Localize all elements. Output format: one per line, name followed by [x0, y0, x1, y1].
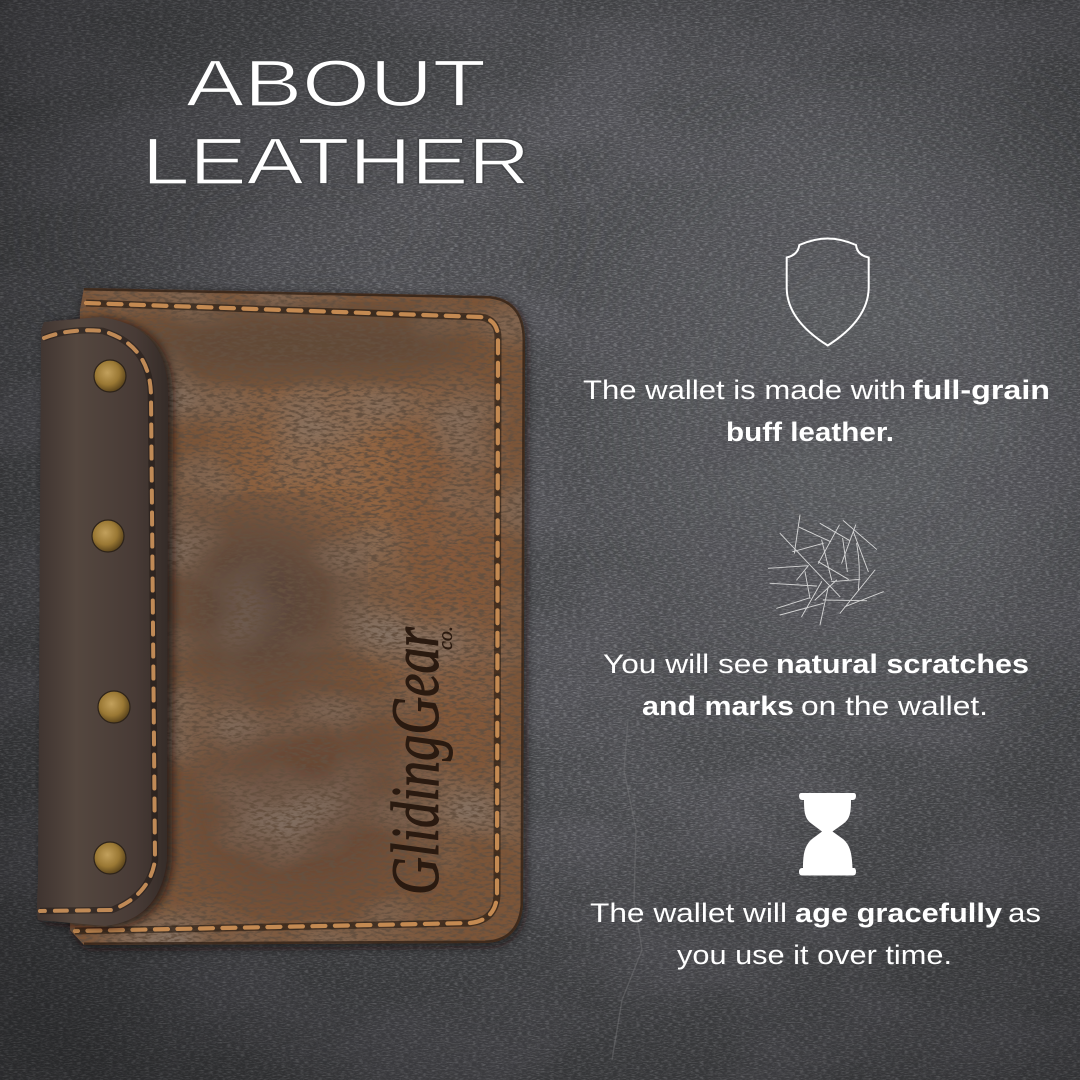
feature: natural scratches — [603, 515, 1029, 721]
text: scratches — [603, 649, 1029, 721]
text: scratches: natural scratches — [776, 649, 1029, 679]
icon: hourglass — [799, 793, 856, 876]
brass rivets — [92, 360, 130, 874]
text: scratches: You will see — [603, 649, 769, 679]
text: scratches: on the wallet. — [801, 691, 988, 721]
text: age gracefully: The wallet will — [590, 898, 787, 928]
text: full-grain: The wallet is made with — [583, 375, 906, 405]
wallet body panel — [50, 280, 540, 960]
text: age gracefully — [590, 898, 1041, 970]
title: ABOUT — [186, 47, 486, 120]
icon: scratches — [768, 515, 883, 625]
strap stitching — [40, 330, 155, 911]
feature: full-grain leather — [583, 238, 1050, 447]
text: age gracefully: age gracefully — [795, 898, 1002, 928]
wallet photo — [37, 280, 540, 960]
title: LEATHER — [142, 125, 530, 198]
text: full-grain: full-grain — [912, 375, 1050, 405]
text: full-grain — [583, 375, 1050, 447]
feature: ages gracefully — [590, 793, 1041, 970]
text: age gracefully: as — [1008, 898, 1041, 928]
body stitching — [75, 303, 498, 931]
icon: shield outline — [787, 238, 869, 346]
logo emboss: co. — [435, 626, 457, 650]
title — [142, 47, 530, 198]
text: full-grain: buff leather. — [726, 417, 894, 447]
text: age gracefully: you use it over time. — [677, 940, 952, 970]
text: scratches: and marks — [642, 691, 794, 721]
logo emboss: GlidingGear — [377, 627, 453, 895]
dark leather strap — [37, 317, 173, 928]
